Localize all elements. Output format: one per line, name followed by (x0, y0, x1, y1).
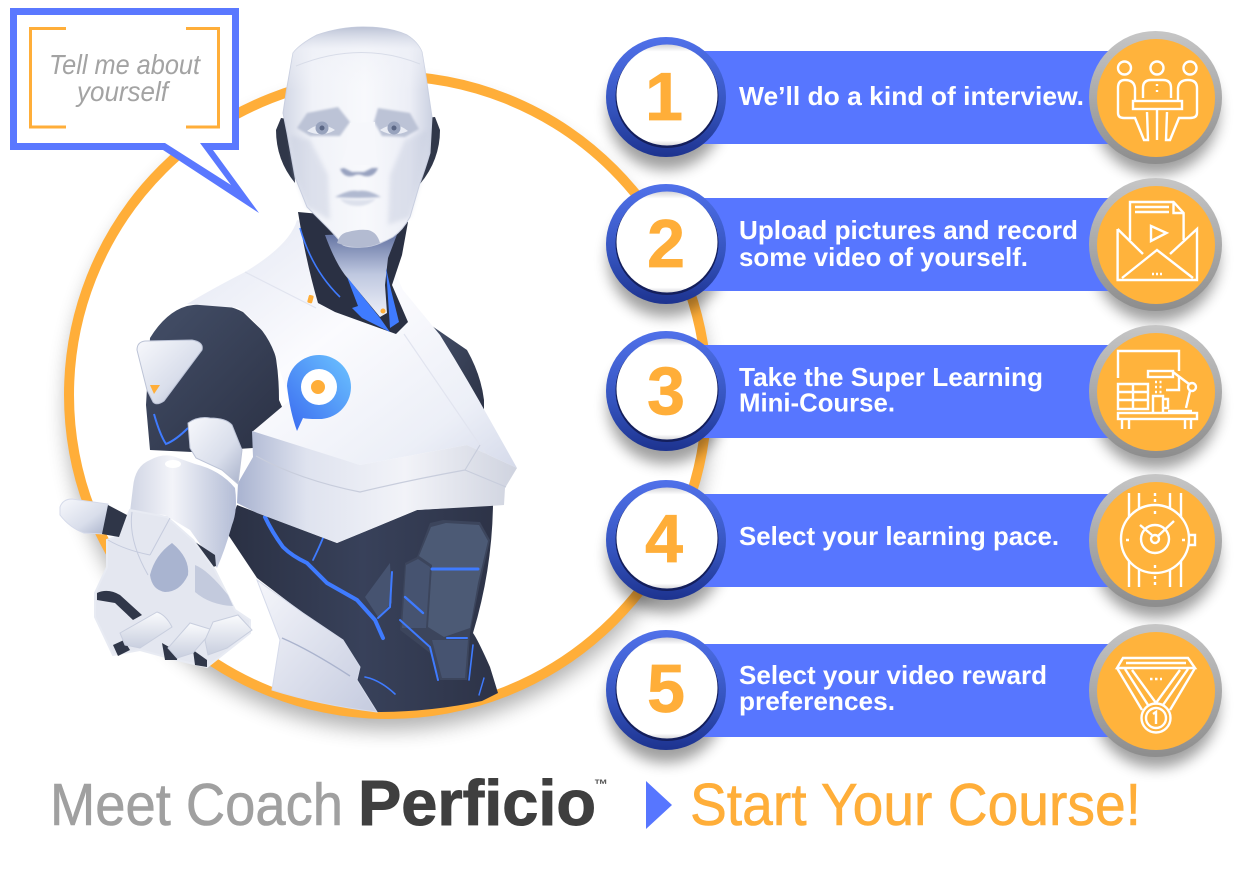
robot: abdomen panels (365, 520, 490, 680)
speech bubble text: Tell me about (49, 49, 201, 80)
robot: neck (325, 232, 398, 317)
step 2 (606, 178, 1222, 322)
step 3 text: Take the Super Learning (739, 362, 1043, 392)
robot: palm creases (108, 512, 170, 575)
step 1 icon: meeting at a table (1089, 31, 1222, 164)
robot: forehead shading (287, 27, 428, 90)
step 3 text (739, 362, 1043, 418)
robot: hand (60, 499, 252, 667)
robot illustration: Coach Perficio (60, 27, 517, 712)
robot: back shoulder (432, 326, 484, 425)
step 4 text: Select your learning pace. (739, 521, 1059, 551)
robot: abdomen (227, 505, 498, 712)
step 5 text: preferences. (739, 686, 895, 716)
step 3 icon: study desk (1089, 325, 1222, 458)
robot: hip (257, 580, 377, 712)
step 1 shadows (608, 49, 1219, 175)
step 2 icon: video envelope (1089, 178, 1222, 311)
step 4 bar (690, 494, 1120, 587)
step 3 bar (690, 345, 1120, 438)
robot: forehead seam (296, 52, 420, 66)
robot: band crease (256, 445, 506, 492)
robot: dark shoulder and upper arm (146, 304, 290, 452)
arrow (646, 781, 672, 829)
robot: thumb (60, 499, 108, 534)
step 5 number badge: 5 (647, 651, 685, 727)
robot: upper arm blue accent (154, 414, 188, 444)
orange text brackets (30, 28, 218, 127)
step 1 (606, 31, 1222, 175)
step 2 text: some video of yourself. (739, 242, 1028, 272)
robot: chest plate (187, 220, 517, 468)
step 3 number badge (606, 331, 726, 451)
step 5 text (739, 660, 1047, 716)
robot: shoulder seam (245, 272, 497, 470)
step 3 (606, 325, 1222, 469)
step 1 number badge (606, 37, 726, 157)
robot: cheek shadows (290, 130, 428, 225)
robot: forearm highlight (165, 460, 181, 468)
robot: finger gaps (97, 591, 207, 667)
footer: Meet Coach Perficio: Meet Coach (50, 772, 343, 838)
step 1 number badge: 1 (645, 59, 683, 135)
robot: wrist gap (192, 540, 216, 570)
robot: ears (276, 117, 440, 184)
step 4 (606, 474, 1222, 618)
footer: Meet Coach Perficio: ™ (594, 776, 608, 792)
speech bubble text (49, 49, 201, 107)
robot: collar orange lights (307, 295, 386, 314)
robot: palm shadow right (195, 565, 233, 606)
step 2 text: Upload pictures and record (739, 215, 1078, 245)
step 5 shadows (608, 642, 1219, 768)
step 3 shadows (608, 343, 1219, 469)
speech bubble (10, 8, 259, 213)
robot: forearm (130, 455, 236, 568)
step 1 text: We’ll do a kind of interview. (739, 81, 1084, 111)
speech bubble text: yourself (75, 76, 171, 107)
footer: Meet Coach Perficio (50, 767, 608, 839)
robot: fingers (120, 612, 252, 658)
footer: Start Your Course!: Start Your Course! (690, 772, 1141, 838)
footer: Meet Coach Perficio: Perficio (358, 767, 596, 839)
robot: palm (95, 510, 250, 667)
step 5 (606, 624, 1222, 768)
orange ring behind the robot (66, 73, 710, 730)
robot: blue energy lines (265, 517, 484, 695)
step 3 text: Mini-Course. (739, 388, 895, 418)
step 5 icon: medal (1089, 624, 1222, 757)
robot: chest lower band (237, 431, 517, 543)
robot: palm shadow (150, 543, 188, 592)
robot: mouth (335, 191, 381, 206)
robot: eye sockets (297, 107, 419, 137)
step 2 number badge (606, 184, 726, 304)
step 5 text: Select your video reward (739, 660, 1047, 690)
robot: neck accents (300, 228, 399, 332)
robot: chin shadow (337, 230, 380, 247)
robot: shoulder pad (137, 340, 202, 404)
step 4 number badge: 4 (645, 501, 683, 577)
robot: forearm guard (188, 418, 242, 484)
robot: neck collar (298, 212, 408, 334)
step 4 icon: wristwatch (1089, 474, 1222, 607)
step 1 bar (690, 51, 1120, 144)
robot: hip crease (282, 638, 350, 676)
step 4 shadows (608, 492, 1219, 618)
robot: eyes (307, 122, 408, 134)
step 4 number badge (606, 480, 726, 600)
robot: P logo (287, 355, 351, 431)
robot: thumb joint (102, 505, 127, 537)
step 3 number badge: 3 (647, 353, 685, 429)
step 5 number badge (606, 630, 726, 750)
step 2 bar (690, 198, 1120, 291)
step 2 number badge: 2 (647, 206, 685, 282)
robot: nose (340, 122, 378, 176)
step 2 text (739, 215, 1078, 272)
robot: head (283, 27, 432, 247)
step 2 shadows (608, 196, 1219, 322)
step 5 bar (690, 644, 1120, 737)
